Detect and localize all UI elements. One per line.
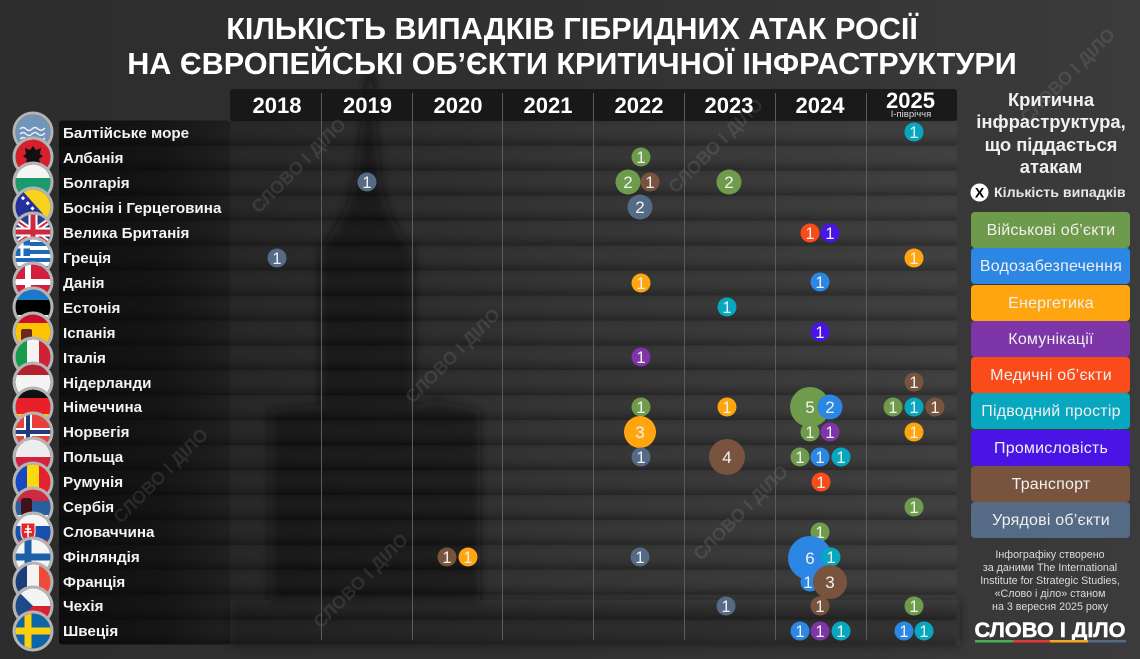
bubbles: 1	[636, 349, 646, 367]
bubbles: 1	[272, 250, 282, 268]
country labels: Чехія	[63, 598, 103, 615]
year headers: 2020	[434, 93, 482, 118]
legend categories: Транспорт	[1012, 476, 1091, 493]
bubbles: 1	[815, 449, 825, 467]
country labels: Нідерланди	[63, 375, 151, 392]
bubbles: 2	[635, 198, 645, 217]
bubbles: 1	[636, 149, 646, 167]
bubbles: 1	[836, 449, 846, 467]
bubbles: 3	[635, 423, 645, 442]
bubbles: 1	[930, 399, 940, 417]
flag: Greece	[13, 237, 53, 277]
watermarks: СЛОВО І ДІЛО	[401, 304, 504, 407]
bubbles: 1	[899, 623, 909, 641]
bubbles: 4	[722, 448, 732, 467]
bubbles: 1	[815, 324, 825, 342]
country labels: Фінляндія	[63, 549, 140, 566]
bubbles: 2	[724, 173, 734, 192]
flag: Spain	[12, 312, 54, 347]
legend key: number of cases: Х	[975, 184, 985, 200]
bubbles: 1	[636, 275, 646, 293]
country labels: Словаччина	[63, 524, 155, 541]
bubbles: 1	[909, 250, 919, 268]
bubbles: 1	[825, 225, 835, 243]
column separators	[322, 93, 866, 640]
country labels: Балтійське море	[63, 125, 189, 142]
flag: Slovakia	[13, 512, 53, 552]
country labels: Італія	[63, 350, 106, 367]
bubbles: 1	[636, 399, 646, 417]
country labels: Франція	[63, 574, 125, 591]
legend categories: Комунікації	[1008, 331, 1094, 348]
bubbles: 1	[815, 598, 825, 616]
bubbles: 1	[815, 623, 825, 641]
legend heading: що піддається	[985, 134, 1117, 155]
source note: на 3 вересня 2025 року	[992, 601, 1109, 613]
watermarks: СЛОВО І ДІЛО	[309, 529, 412, 632]
flag: Albania	[13, 137, 53, 177]
bubbles	[268, 122, 944, 641]
year headers	[253, 88, 935, 120]
watermarks: СЛОВО І ДІЛО	[1024, 414, 1127, 517]
bubbles: 1	[909, 124, 919, 142]
bubbles: 1	[909, 374, 919, 392]
bubbles: 1	[442, 549, 452, 567]
year headers: 2025	[886, 88, 935, 113]
country labels: Норвегія	[63, 424, 130, 441]
bubbles: 1	[362, 174, 372, 192]
bubbles: 1	[795, 623, 805, 641]
year headers: 2019	[343, 93, 392, 118]
bubbles: 1	[636, 449, 646, 467]
flag: Netherlands	[13, 362, 53, 402]
flag: Finland	[12, 536, 54, 572]
bubbles: 1	[825, 424, 835, 442]
flag: Poland	[13, 437, 53, 477]
bubbles: 1	[909, 499, 919, 517]
flag: Bulgaria	[13, 162, 53, 202]
bubbles: 1	[826, 549, 836, 567]
legend heading: інфраструктура,	[976, 111, 1126, 132]
year header band	[230, 89, 957, 121]
year headers: 2018	[253, 93, 301, 118]
bubbles: 1	[805, 225, 815, 243]
legend categories: Військові об’єкти	[987, 222, 1115, 239]
legend categories: Медичні об’єкти	[990, 367, 1112, 384]
flag: Norway	[13, 412, 53, 452]
bubbles: 1	[722, 299, 732, 317]
watermarks: СЛОВО І ДІЛО	[689, 461, 792, 564]
bubbles: 1	[645, 174, 655, 192]
bubbles: 1	[909, 424, 919, 442]
flag: Baltic Sea	[13, 112, 53, 152]
bubbles: 1	[635, 549, 645, 567]
year headers: 2024	[796, 93, 845, 118]
background photo	[235, 0, 1140, 659]
country labels: Польща	[63, 449, 124, 466]
bubbles: 1	[463, 549, 473, 567]
source note: за даними The International	[983, 562, 1117, 574]
source note	[980, 549, 1120, 613]
legend categories: Енергетика	[1008, 295, 1094, 312]
bubbles: 1	[888, 399, 898, 417]
bubbles: 1	[795, 449, 805, 467]
legend heading: атакам	[1020, 156, 1082, 177]
country labels: Болгарія	[63, 175, 130, 192]
flag: Serbia	[13, 487, 53, 527]
country labels: Естонія	[63, 300, 120, 317]
year headers: 2021	[524, 93, 572, 118]
country labels: Греція	[63, 250, 111, 267]
flag: Czechia	[13, 586, 53, 626]
legend categories	[971, 212, 1130, 538]
flag: Italy	[13, 337, 53, 377]
source note: «Слово і діло» станом	[995, 588, 1105, 600]
watermarks: СЛОВО І ДІЛО	[109, 424, 212, 527]
flag: United Kingdom	[13, 212, 53, 252]
watermarks: СЛОВО І ДІЛО	[664, 94, 767, 197]
country label panel	[59, 120, 230, 644]
logo: СЛОВО І ДІЛО	[974, 619, 1126, 642]
country labels: Данія	[63, 275, 105, 292]
flag: Estonia	[13, 287, 53, 327]
flag: Germany	[13, 387, 53, 427]
bubbles: 1	[909, 598, 919, 616]
country labels: Румунія	[63, 474, 123, 491]
flags column	[13, 112, 53, 651]
title: НА ЄВРОПЕЙСЬКІ ОБ’ЄКТИ КРИТИЧНОЇ ІНФРАСТРУКТУРИ	[127, 45, 1017, 81]
bubbles: 1	[816, 474, 826, 492]
flag: Romania	[13, 462, 53, 502]
bubbles: 1	[836, 623, 846, 641]
table shading	[230, 120, 957, 644]
watermarks: СЛОВО І ДІЛО	[247, 114, 350, 217]
country labels: Сербія	[63, 499, 114, 516]
title	[127, 12, 1017, 81]
year headers: І-півріччя	[891, 109, 931, 120]
bubbles: 1	[721, 598, 731, 616]
year headers: 2022	[615, 93, 663, 118]
flag: Denmark	[13, 262, 53, 302]
bubbles: 1	[815, 524, 825, 542]
bubbles: 1	[805, 424, 815, 442]
country labels	[63, 125, 222, 640]
bubbles: 2	[825, 398, 835, 417]
legend heading: Критична	[1008, 89, 1095, 110]
bubbles: 1	[803, 574, 813, 592]
source note: Institute for Strategic Studies,	[980, 575, 1120, 587]
legend key: number of cases: Кількість випадків	[994, 185, 1126, 201]
legend categories: Підводний простір	[981, 403, 1121, 420]
legend categories: Урядові об’єкти	[992, 512, 1110, 529]
flag: France	[12, 562, 54, 596]
bubbles: 2	[623, 173, 633, 192]
country labels: Іспанія	[63, 325, 116, 342]
bubbles: 5	[805, 398, 815, 417]
flag: Bosnia and Herzegovina	[12, 186, 54, 222]
year headers: 2023	[705, 93, 753, 118]
legend categories: Водозабезпечення	[980, 258, 1122, 275]
bubbles: 1	[919, 623, 929, 641]
country labels: Велика Британія	[63, 225, 189, 242]
watermarks: СЛОВО І ДІЛО	[1016, 24, 1119, 127]
bubbles: 1	[815, 274, 825, 292]
country labels: Швеція	[63, 623, 118, 640]
source note: Інфографіку створено	[995, 549, 1105, 561]
country labels: Німеччина	[63, 399, 143, 416]
bubbles: 3	[825, 573, 835, 592]
country labels: Боснія і Герцеговина	[63, 200, 222, 217]
legend categories: Промисловість	[994, 440, 1108, 457]
title: КІЛЬКІСТЬ ВИПАДКІВ ГІБРИДНИХ АТАК РОСІЇ	[226, 12, 919, 46]
table rows	[59, 120, 957, 644]
bubbles: 6	[805, 549, 815, 568]
bubbles: 1	[722, 399, 732, 417]
legend heading	[976, 89, 1126, 177]
flag: Sweden	[13, 611, 53, 651]
country labels: Албанія	[63, 150, 124, 167]
bubbles: 1	[909, 399, 919, 417]
